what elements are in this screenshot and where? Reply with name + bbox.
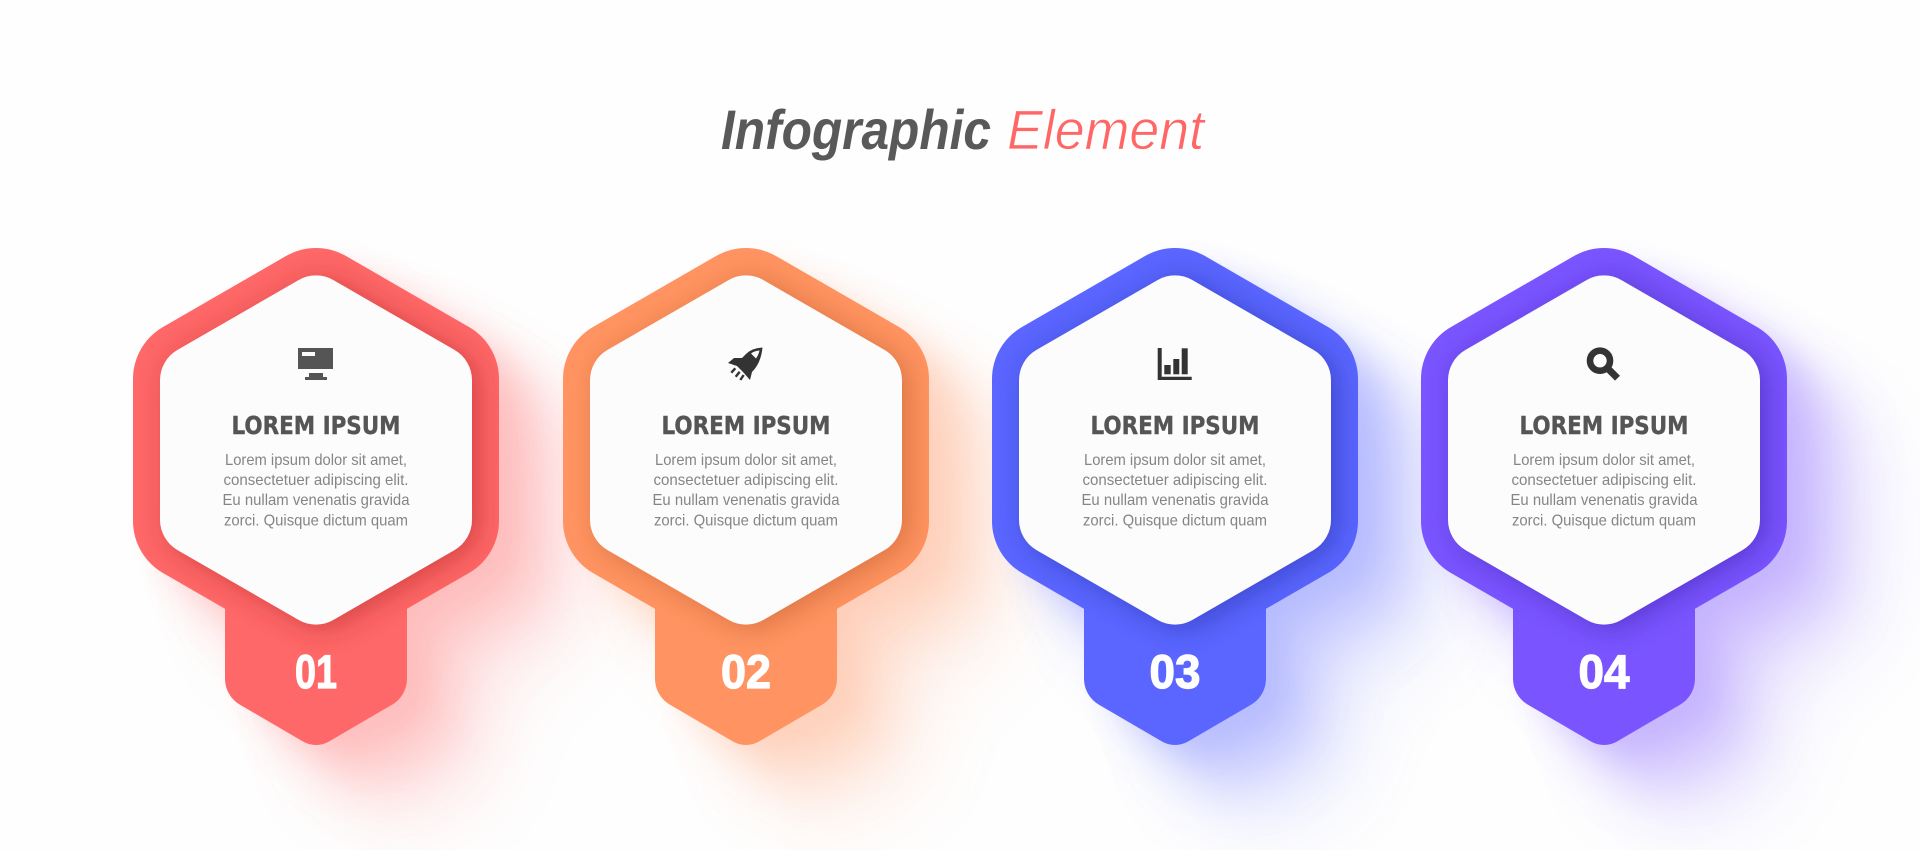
text block: zorci. Quisque dictum quam [654,512,838,530]
text block: Lorem ipsum dolor sit amet, [1084,452,1266,469]
heading: LOREM IPSUM [1520,411,1688,440]
text block: Eu nullam venenatis gravida [1510,492,1698,509]
text block: Lorem ipsum dolor sit amet, [225,452,407,469]
heading: LOREM IPSUM [232,411,400,440]
panel: step 04 [1421,248,1877,830]
number: 03 [1150,645,1200,698]
icon: magnifier [1590,351,1618,378]
panel: step 01 [133,248,589,830]
text block: consectetuer adipiscing elit. [654,472,838,489]
number: 04 [1578,645,1630,698]
inner hexagon [1448,275,1760,625]
icon: rocket [728,348,762,380]
ring and number tab [992,248,1358,745]
text block: consectetuer adipiscing elit. [224,472,408,489]
inner hexagon [1019,275,1331,625]
text block [222,452,410,530]
title: Infographic [721,98,991,161]
heading: LOREM IPSUM [1090,411,1260,440]
text block: consectetuer adipiscing elit. [1512,472,1696,489]
text block: zorci. Quisque dictum quam [224,512,408,530]
text block: Eu nullam venenatis gravida [1082,492,1269,509]
text block [1082,452,1269,530]
panel: step 02 [563,248,1019,830]
text block: Eu nullam venenatis gravida [652,492,840,509]
text block: zorci. Quisque dictum quam [1083,512,1267,530]
text block [1510,452,1698,530]
icon: bar chart [1158,348,1192,380]
text block [652,452,840,530]
number: 01 [295,645,337,698]
text block: zorci. Quisque dictum quam [1512,512,1696,530]
heading: LOREM IPSUM [662,411,830,440]
text block: Lorem ipsum dolor sit amet, [655,452,837,469]
title [721,98,1206,161]
number: 02 [721,645,771,698]
text block: Lorem ipsum dolor sit amet, [1513,452,1695,469]
title: Element [1007,98,1206,161]
ring and number tab [563,248,929,745]
ring and number tab [1421,248,1787,745]
text block: Eu nullam venenatis gravida [222,492,410,509]
inner hexagon [160,275,472,625]
icon: monitor [298,348,333,380]
text block: consectetuer adipiscing elit. [1082,472,1268,489]
panel: step 03 [992,248,1448,830]
inner hexagon [590,275,902,625]
ring and number tab [133,248,499,745]
